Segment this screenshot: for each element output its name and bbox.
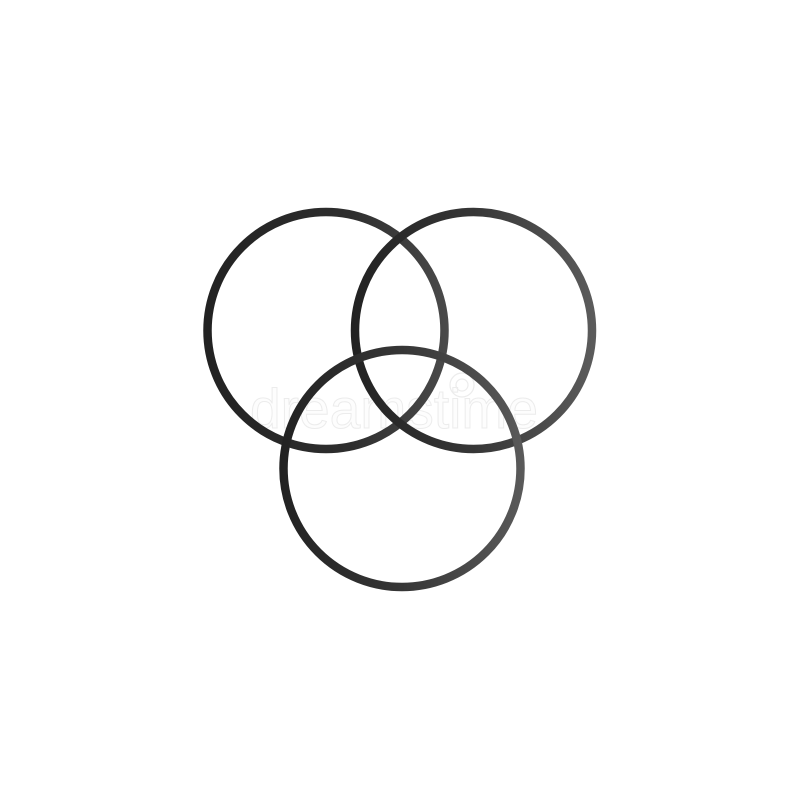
ring: bottom: [284, 350, 520, 587]
watermark text: dreamstime: [250, 377, 538, 440]
icon: watermark spiral: [450, 373, 474, 397]
ring: top left: [208, 212, 444, 449]
ring: top right: [355, 212, 592, 449]
